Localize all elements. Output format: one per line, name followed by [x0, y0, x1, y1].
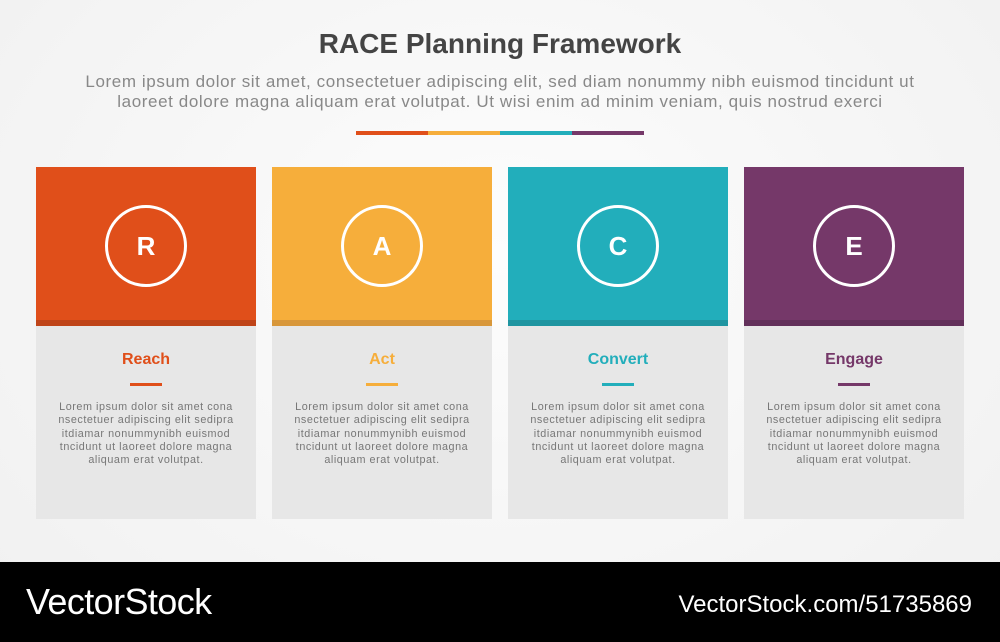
text: reach: nsectetuer adipiscing elit sedipra — [58, 414, 234, 426]
icon: E: E — [845, 231, 863, 261]
panel: act — [272, 167, 492, 519]
text: engage: itdiamar nonummynibh euismod — [770, 428, 938, 440]
icon: C — [577, 205, 659, 287]
text: convert — [530, 401, 706, 466]
footer logo: VectorStock — [26, 581, 212, 622]
heading: engage: Engage — [825, 351, 883, 368]
icon: A: A — [373, 231, 391, 261]
icon: R — [105, 205, 187, 287]
icon: E — [813, 205, 895, 287]
text: reach: itdiamar nonummynibh euismod — [62, 428, 230, 440]
text: convert: nsectetuer adipiscing elit sedipra — [530, 414, 706, 426]
panel: reach — [36, 167, 256, 519]
text: reach: Lorem ipsum dolor sit amet cona — [59, 401, 233, 413]
subtitle — [85, 72, 915, 111]
text: convert: itdiamar nonummynibh euismod — [534, 428, 702, 440]
text: act — [294, 401, 470, 466]
heading: act: Act — [369, 351, 395, 368]
text: act: Lorem ipsum dolor sit amet cona — [295, 401, 469, 413]
heading: reach: Reach — [122, 351, 170, 368]
text: convert: tncidunt ut laoreet dolore magna — [532, 441, 704, 453]
text: act: aliquam erat volutpat. — [324, 454, 440, 466]
text: engage: Lorem ipsum dolor sit amet cona — [767, 401, 941, 413]
heading: convert: Convert — [588, 351, 648, 368]
text: convert: Lorem ipsum dolor sit amet cona — [531, 401, 705, 413]
subtitle: laoreet dolore magna aliquam erat volutpat. Ut wisi enim ad minim veniam, quis nostrud exerci — [117, 92, 883, 111]
panel: convert — [508, 167, 728, 519]
text: reach: tncidunt ut laoreet dolore magna — [60, 441, 232, 453]
text: engage: tncidunt ut laoreet dolore magna — [768, 441, 940, 453]
icon: C: C — [609, 231, 627, 261]
title: RACE Planning Framework — [319, 28, 681, 59]
color divider — [356, 131, 644, 135]
text: reach: aliquam erat volutpat. — [88, 454, 204, 466]
footer id: VectorStock.com/51735869 — [678, 591, 972, 618]
text: act: nsectetuer adipiscing elit sedipra — [294, 414, 470, 426]
text: engage — [766, 401, 942, 466]
text: engage: aliquam erat volutpat. — [796, 454, 912, 466]
footer bar — [0, 562, 1000, 642]
text: convert: aliquam erat volutpat. — [560, 454, 676, 466]
text: engage: nsectetuer adipiscing elit sedipra — [766, 414, 942, 426]
text: reach — [58, 401, 234, 466]
text: act: tncidunt ut laoreet dolore magna — [296, 441, 468, 453]
panel: engage — [744, 167, 964, 519]
text: act: itdiamar nonummynibh euismod — [298, 428, 466, 440]
subtitle: Lorem ipsum dolor sit amet, consectetuer adipiscing elit, sed diam nonummy nibh euismod tincidunt ut — [85, 72, 915, 91]
icon: A — [341, 205, 423, 287]
icon: R: R — [137, 231, 155, 261]
